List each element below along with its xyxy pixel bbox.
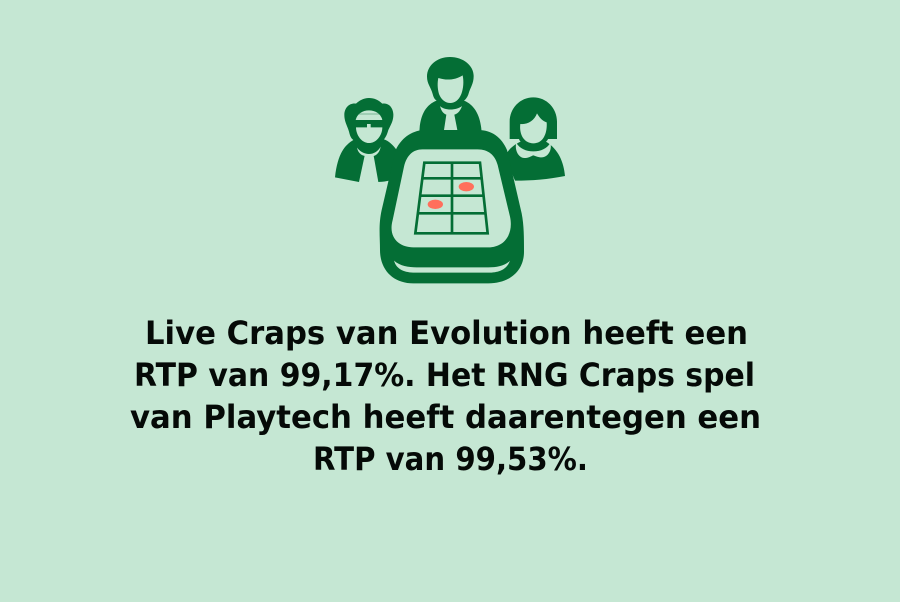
icon: centre player <box>419 57 482 133</box>
table grid <box>415 163 488 233</box>
text block: RTP statement: RTP van 99,53%. <box>313 440 588 478</box>
icon: craps table <box>380 130 524 283</box>
text block: RTP statement: Live Craps van Evolution heeft een <box>145 314 748 352</box>
text block: RTP statement: RTP van 99,17%. Het RNG Craps spel <box>134 356 755 394</box>
text block: RTP statement: van Playtech heeft daarentegen een <box>130 398 761 436</box>
icon: right player <box>505 97 565 181</box>
red marker <box>428 200 443 209</box>
text block: RTP statement <box>130 314 761 478</box>
icon: three players around a craps table <box>335 57 565 284</box>
red marker <box>459 182 474 191</box>
icon: left player <box>335 98 397 182</box>
